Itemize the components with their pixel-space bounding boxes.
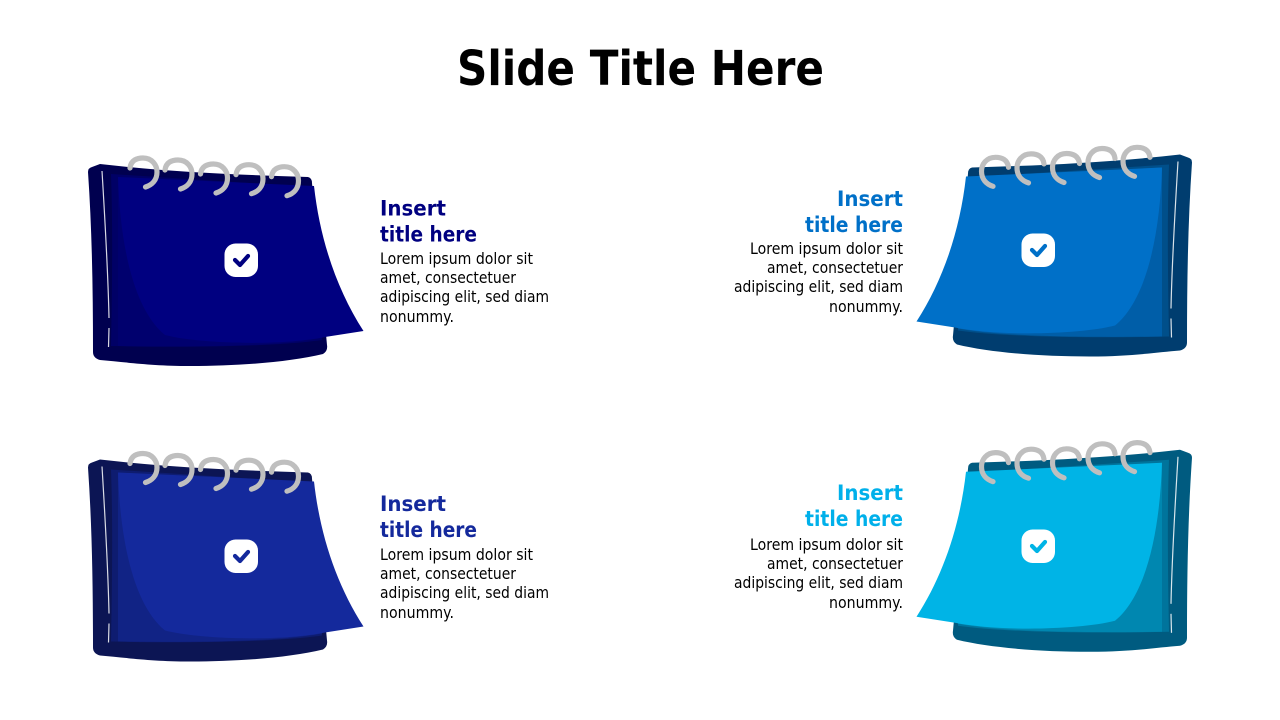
text block: bottom right: amet, consectetuer <box>767 554 903 573</box>
text block: top right: amet, consectetuer <box>767 258 903 277</box>
text block: top left: adipiscing elit, sed diam <box>380 287 549 306</box>
text block: bottom right: Lorem ipsum dolor sit <box>750 535 903 554</box>
text block: top right: title here <box>805 213 903 238</box>
text block: top right <box>734 187 903 316</box>
text block: top left: Insert <box>380 196 446 222</box>
icon: check badge bottom right <box>1022 530 1055 563</box>
icon: check badge top right <box>1022 234 1055 267</box>
text block: top right: Insert <box>837 187 903 212</box>
text block: top left <box>380 196 549 326</box>
icon: check badge bottom left <box>224 540 258 573</box>
text block: top right: nonummy. <box>829 297 903 316</box>
icon: check badge top left <box>224 244 258 277</box>
text block: bottom right: nonummy. <box>829 593 903 612</box>
text block: bottom right: title here <box>805 507 903 532</box>
text block: bottom left: title here <box>380 518 477 543</box>
title: Slide Title Here <box>457 41 824 97</box>
text block: top left: amet, consectetuer <box>380 268 516 287</box>
text block: bottom left: adipiscing elit, sed diam <box>380 583 549 602</box>
text block: bottom left: amet, consectetuer <box>380 564 516 583</box>
text block: top left: Lorem ipsum dolor sit <box>380 249 533 268</box>
text block: top right: adipiscing elit, sed diam <box>734 277 903 296</box>
text block: bottom right: Insert <box>837 481 903 506</box>
text block: bottom left <box>380 492 549 622</box>
text block: bottom left: nonummy. <box>380 603 454 622</box>
text block: bottom left: Insert <box>380 492 446 517</box>
text block: bottom left: Lorem ipsum dolor sit <box>380 545 533 564</box>
calendar icon: top left <box>88 158 364 366</box>
text block: bottom right: adipiscing elit, sed diam <box>734 573 903 592</box>
text block: top left: nonummy. <box>380 307 454 326</box>
calendar icon: top right <box>916 147 1192 356</box>
text block: bottom right <box>734 481 903 612</box>
text block: top right: Lorem ipsum dolor sit <box>750 239 903 258</box>
calendar icon: bottom left <box>88 454 364 662</box>
text block: top left: title here <box>380 222 477 248</box>
calendar icon: bottom right <box>916 443 1192 652</box>
